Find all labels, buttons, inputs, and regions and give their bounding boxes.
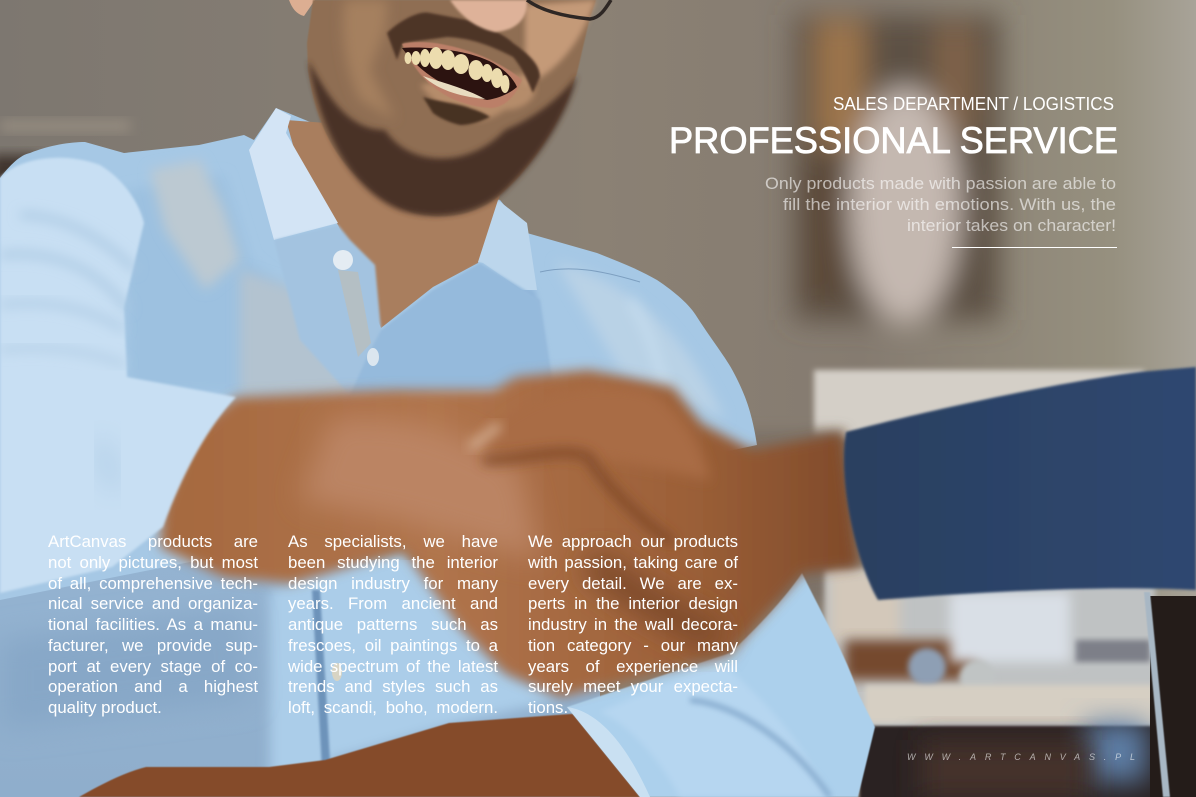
man: lower shirt xyxy=(0,550,600,797)
lower teeth xyxy=(423,76,485,99)
man: shirt torso xyxy=(0,108,757,600)
text column 3: tions. xyxy=(528,698,568,717)
text column 3: industry in the wall decora- xyxy=(528,615,738,634)
text column 3: We approach our products xyxy=(528,532,738,551)
blurred painting xyxy=(795,15,1000,323)
man: smile with teeth xyxy=(402,42,522,108)
text column 1: port at every stage of co- xyxy=(48,656,258,676)
text column 1: operation and a highest xyxy=(48,677,258,696)
tagline: interior takes on character! xyxy=(907,216,1116,235)
title: PROFESSIONAL SERVICE xyxy=(669,120,1118,161)
text column 1: facturer, we provide sup- xyxy=(48,636,258,655)
text column 2: design industry for many xyxy=(288,574,498,592)
text column 2: wide spectrum of the latest xyxy=(288,656,498,676)
text column 1: nical service and organiza- xyxy=(48,594,258,613)
blurred handshake arms xyxy=(160,370,859,697)
text column 2: frescoes, oil paintings to a xyxy=(288,636,498,655)
moustache xyxy=(387,12,540,93)
text column 3: tion category - our many xyxy=(528,636,738,655)
tagline: fill the interior with emotions. With us, the xyxy=(783,195,1116,214)
text column 2: antique patterns such as xyxy=(288,615,498,634)
stubble shading xyxy=(308,60,577,216)
subtitle: SALES DEPARTMENT / LOGISTICS xyxy=(833,94,1114,114)
text column 1: of all, comprehensive tech- xyxy=(48,574,258,592)
laptop lid xyxy=(1150,596,1196,797)
dark floor xyxy=(860,726,1160,797)
man: neck xyxy=(286,120,500,328)
text column 3 xyxy=(528,532,738,717)
text column 3: years of experience will xyxy=(528,656,738,676)
partner: navy jacket sleeve xyxy=(844,367,1196,600)
text column 2 xyxy=(288,532,498,717)
text column 1 xyxy=(48,532,258,717)
blurred white cabinet xyxy=(814,370,1144,440)
text column 2: been studying the interior xyxy=(288,553,498,572)
text column 2: trends and styles such as xyxy=(288,677,498,696)
tagline: Only products made with passion are able to xyxy=(765,174,1116,193)
text column 2: As specialists, we have xyxy=(288,532,498,551)
blurred desk with objects xyxy=(825,570,1155,730)
tagline xyxy=(765,174,1116,235)
website url: WWW.ARTCANVAS.PL xyxy=(907,752,1135,762)
glasses frame xyxy=(527,0,611,19)
text column 2: loft, scandi, boho, modern. xyxy=(288,698,498,717)
nose xyxy=(450,0,527,32)
upper teeth xyxy=(404,47,510,93)
text column 1: not only pictures, but most xyxy=(48,553,258,572)
man: right forearm bottom xyxy=(79,713,640,797)
text column 1: tional facilities. As a manu- xyxy=(48,615,258,634)
soul patch xyxy=(423,97,490,125)
text column 1: quality product. xyxy=(48,698,162,717)
man: face and beard xyxy=(289,0,596,216)
text column 3: with passion, taking care of xyxy=(528,553,738,572)
man: rolled sleeve right xyxy=(567,573,875,797)
text column 2: years. From ancient and xyxy=(288,594,498,613)
text column 3: surely meet your expecta- xyxy=(528,677,738,696)
heading block xyxy=(669,94,1118,248)
man: left sleeve and cuff xyxy=(0,158,236,593)
man: collar and placket xyxy=(249,108,552,395)
text column 1: ArtCanvas products are xyxy=(48,532,258,551)
text column 3: every detail. We are ex- xyxy=(528,574,738,592)
text column 3: perts in the interior design xyxy=(528,594,738,613)
